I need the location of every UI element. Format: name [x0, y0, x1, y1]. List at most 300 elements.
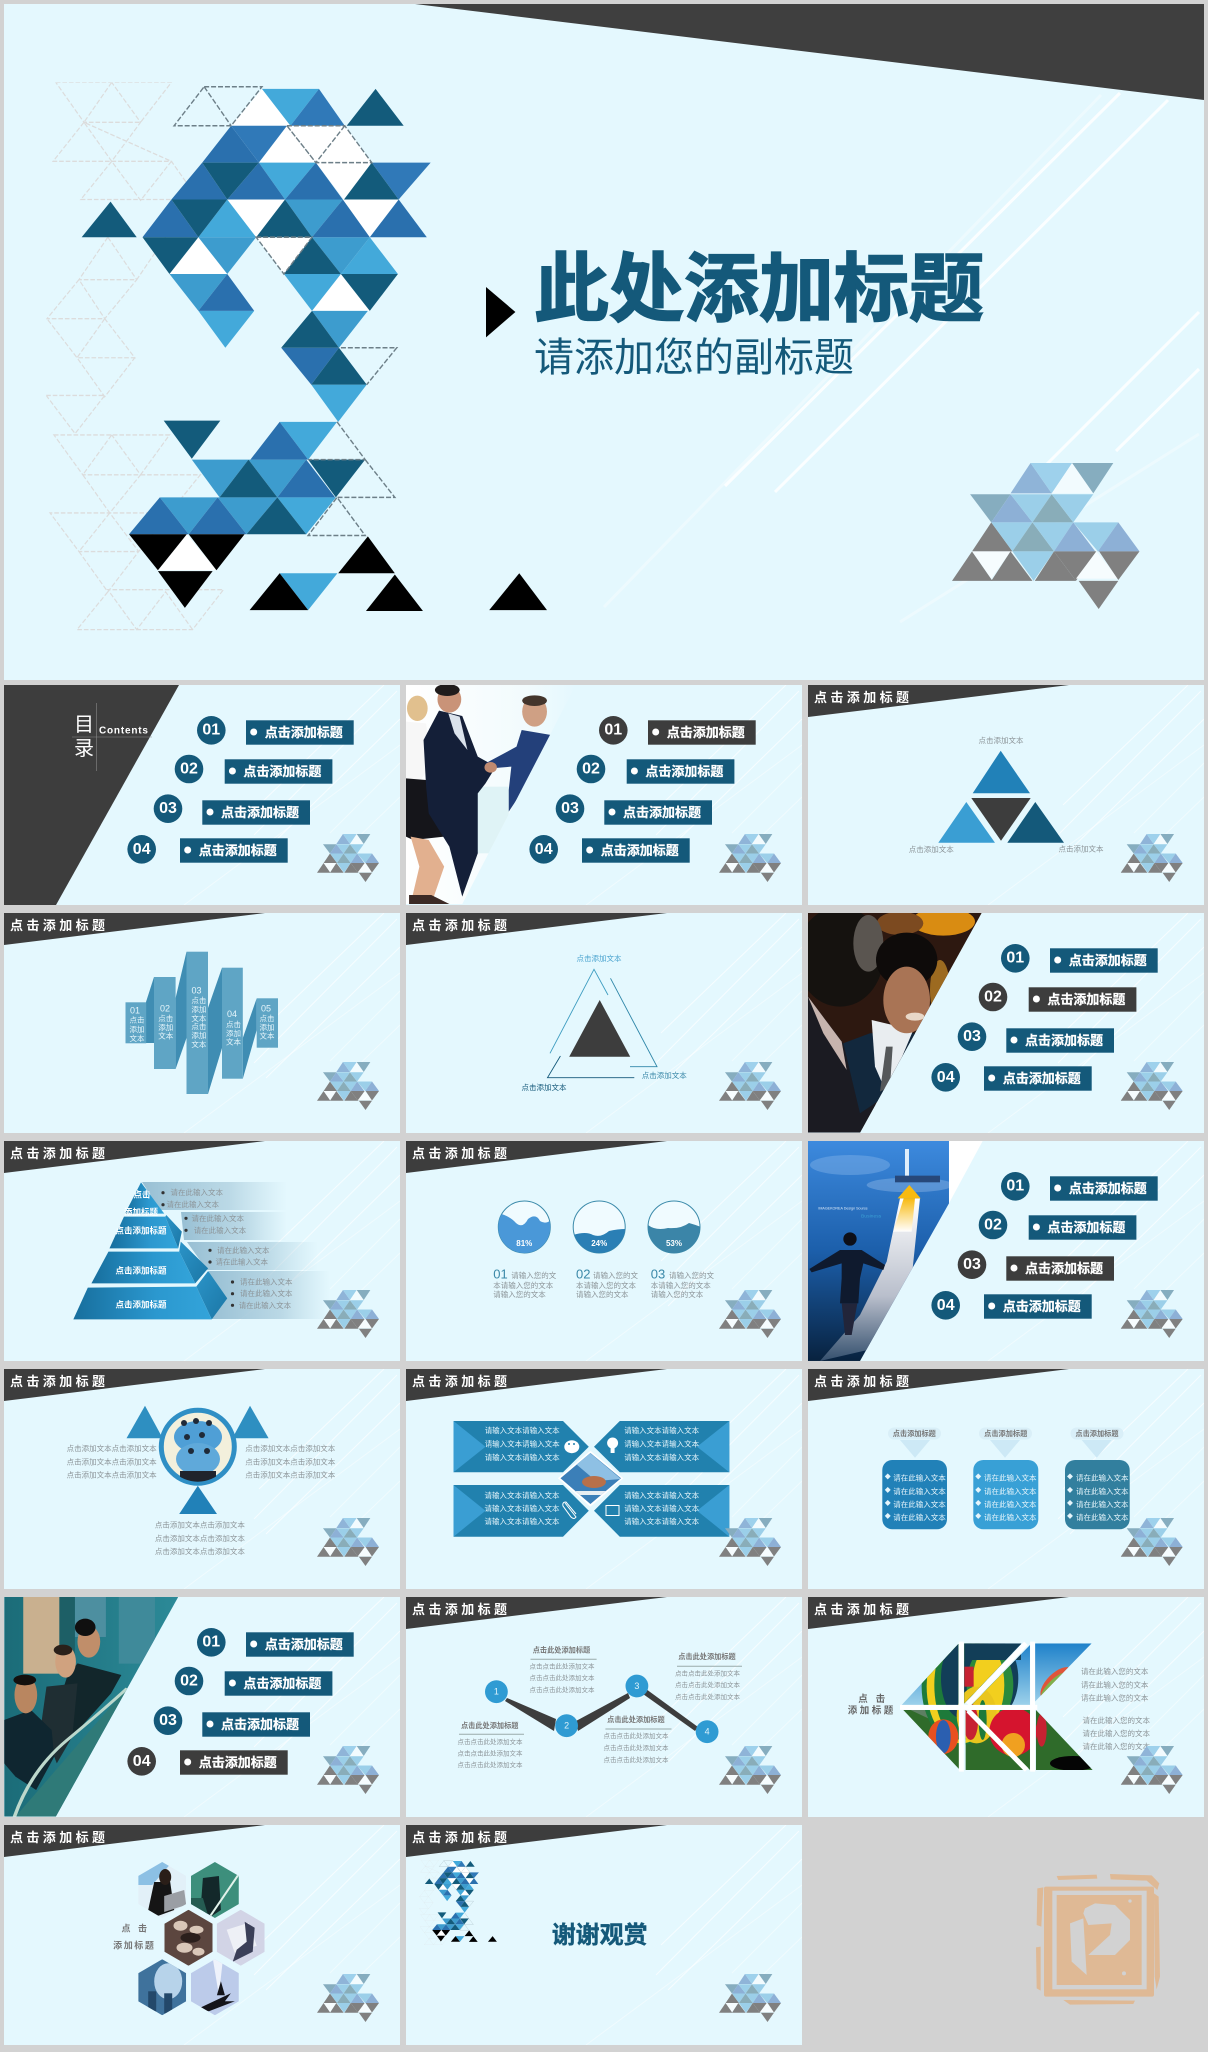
item 04: [931, 1291, 1092, 1320]
card 2: 请在此输入文本: [984, 1499, 1037, 1509]
cover small triangle logo: [952, 463, 1140, 609]
logo: [1121, 1290, 1183, 1338]
timeline nodes: 1: [494, 1687, 499, 1697]
header banner: [808, 685, 1069, 717]
card 2: ◆: [975, 1487, 981, 1494]
text 02: 请输入您的文: [593, 1270, 638, 1280]
header banner: [406, 1369, 667, 1401]
gauge 24%: [573, 1201, 626, 1256]
item 01 highlighted: 点击添加标题: [667, 725, 745, 740]
pyramid labels: [115, 1189, 167, 1309]
three triangles: [126, 1406, 269, 1514]
stamp logo: [1036, 1874, 1160, 2005]
panel: triangle diagram slide: [808, 685, 1204, 905]
item 04: [127, 835, 288, 864]
text block 2: 点击点击此处添加文本: [530, 1685, 595, 1694]
text right: 点击添加文本点击添加文本: [245, 1470, 336, 1480]
item 01: 点击添加标题: [265, 725, 343, 740]
text right: [245, 1443, 336, 1480]
text 01: 请输入您的文本: [493, 1289, 546, 1299]
text 03: [651, 1266, 714, 1299]
text block 4: 点击点击此处添加文本: [675, 1692, 740, 1701]
text block 3: 点击此处添加标题: [607, 1715, 665, 1724]
team photo circle: [161, 1410, 234, 1485]
card 1: 请在此输入文本: [893, 1499, 946, 1509]
item 02 highlighted: [979, 983, 1136, 1012]
item 03 highlighted: 03: [963, 1256, 981, 1273]
text block 3: [604, 1715, 672, 1764]
text bottom: 点击添加文本点击添加文本: [155, 1533, 245, 1543]
icon: bulb: [607, 1438, 618, 1453]
panel: zigzag timeline slide: [406, 1597, 802, 1817]
header banner: 点击添加标题: [10, 1146, 108, 1161]
zigzag connectors: [505, 1689, 698, 1731]
item 03: 03: [963, 1028, 981, 1045]
timeline nodes: [485, 1675, 718, 1743]
card 2: ◆: [975, 1514, 981, 1521]
card 3: ◆: [1067, 1474, 1073, 1481]
folded ribbon: 文本: [226, 1036, 241, 1046]
folded ribbon: 04: [227, 1009, 237, 1019]
right text: 请在此输入您的文本: [1083, 1728, 1151, 1738]
left label: [848, 1693, 896, 1716]
bullet list: 请在此输入文本: [216, 1256, 268, 1266]
hexagon photo 3: [164, 1910, 212, 1966]
item 04: 04: [133, 841, 151, 858]
item 02: 02: [180, 760, 198, 778]
panel: handshake contents slide: [406, 684, 802, 905]
card 2: 请在此输入文本: [984, 1472, 1037, 1482]
item 03: 点击添加标题: [623, 805, 701, 820]
right text: 请在此输入您的文本: [1083, 1715, 1151, 1725]
item 01: 01: [202, 722, 220, 738]
icon: tablet: [606, 1506, 619, 1516]
block text: 请输入文本请输入文本: [624, 1503, 700, 1513]
panel: thank you slide: [406, 1825, 802, 2045]
item 03: [958, 1022, 1114, 1053]
card 1: 请在此输入文本: [893, 1486, 946, 1496]
logo: [317, 1062, 379, 1110]
item 02 highlighted: 点击添加标题: [1047, 992, 1125, 1007]
text block 2: 点击点击此处添加文本: [530, 1662, 595, 1670]
centre diamond photo: [558, 1451, 624, 1506]
panel: three cards slide: [808, 1369, 1204, 1589]
left label: 点 击: [858, 1693, 886, 1705]
hexagon photo 2: [191, 1862, 239, 1918]
text 03: 请输入您的文本: [651, 1289, 704, 1299]
block text: 请输入文本请输入文本: [484, 1516, 560, 1526]
panel: cover slide: [4, 4, 1204, 680]
text 02: 本请输入您的文本: [576, 1280, 636, 1290]
panel: hexagon gallery slide: [4, 1825, 400, 2045]
header banner: 点击添加标题: [10, 918, 108, 933]
card 3: 请在此输入文本: [1076, 1499, 1129, 1509]
item 03: 点击添加标题: [1025, 1033, 1103, 1048]
text right: 点击添加文本点击添加文本: [245, 1443, 336, 1453]
folded ribbon: 01: [130, 1005, 140, 1015]
item 04: 04: [937, 1069, 955, 1086]
four blocks: [454, 1421, 729, 1537]
pyramid labels: 添加标题: [124, 1207, 158, 1217]
header banner: [808, 1597, 1069, 1629]
gauge 53%: [648, 1201, 701, 1256]
item 03: [154, 1706, 310, 1737]
card 2: 请在此输入文本: [984, 1486, 1037, 1496]
pyramid: [73, 1182, 227, 1319]
folded ribbon: 添加: [226, 1028, 241, 1038]
item 03: 03: [561, 800, 579, 817]
item 01: 点击添加标题: [1069, 1181, 1147, 1196]
pyramid labels: 点击添加标题: [115, 1225, 167, 1235]
folded ribbon: 文本: [191, 1013, 207, 1023]
cover triangle mosaic: [46, 82, 547, 630]
bullet list: 请在此输入文本: [192, 1213, 244, 1223]
text left: 点击添加文本点击添加文本: [67, 1443, 157, 1453]
card 3: 请在此输入文本: [1076, 1486, 1129, 1496]
panel: cycle triangle slide: [406, 913, 802, 1133]
block text: 请输入文本请输入文本: [484, 1503, 560, 1513]
header banner: [4, 1141, 265, 1173]
card 2: ◆: [975, 1474, 981, 1481]
header banner: [406, 913, 667, 945]
item 01: [1001, 1172, 1158, 1201]
text right: 点击添加文本点击添加文本: [245, 1456, 336, 1466]
logo: [317, 1746, 379, 1794]
text block 2: 点击此处添加标题: [533, 1646, 590, 1654]
item 01: [197, 716, 354, 745]
gauge 81%: [496, 1201, 552, 1256]
folded ribbon: 文本: [191, 1039, 207, 1049]
item 02: 点击添加标题: [645, 764, 723, 779]
logo: [719, 1290, 781, 1338]
text bottom: [155, 1520, 245, 1556]
logo: [719, 1746, 781, 1794]
dark centre triangle: [569, 1000, 630, 1057]
fading text bands: [142, 1182, 330, 1319]
white sliver: [949, 1141, 983, 1203]
icon: paperclip: [563, 1502, 576, 1518]
panel: arrow photo contents slide: [808, 1141, 1204, 1361]
folded ribbon: 添加: [158, 1022, 173, 1032]
logo: [317, 1290, 379, 1338]
item 02: 02: [984, 1216, 1002, 1234]
folded ribbon: 添加: [191, 1030, 206, 1040]
logo: [317, 1518, 379, 1566]
hexagon photo 4: [217, 1910, 265, 1966]
item 03: 03: [159, 1712, 177, 1729]
item 03: [556, 794, 712, 825]
mini triangle mosaic: [419, 1860, 497, 1945]
item 01: [1001, 944, 1158, 973]
labels: [522, 953, 687, 1092]
header banner: 点击添加标题: [412, 1830, 510, 1845]
item 02: 02: [582, 760, 600, 778]
logo: [719, 1062, 781, 1110]
text block 3: 点击点击此处添加文本: [604, 1731, 669, 1740]
logo: [317, 834, 379, 882]
text 03: 请输入您的文: [669, 1270, 714, 1280]
logo: [1121, 1518, 1183, 1566]
labels: 点击添加文本: [642, 1070, 687, 1080]
text 02: 02: [576, 1266, 590, 1282]
text left: 点击添加文本点击添加文本: [67, 1470, 157, 1480]
item 04: 点击添加标题: [1003, 1071, 1081, 1086]
text left: [67, 1443, 157, 1480]
text 03: 03: [651, 1266, 665, 1282]
text block 3: 点击点击此处添加文本: [604, 1755, 669, 1764]
item 04: [931, 1063, 1092, 1092]
header banner: 点击添加标题: [412, 1374, 510, 1389]
timeline nodes: 4: [705, 1727, 710, 1737]
four-triangle diagram: [938, 751, 1064, 843]
item 04 highlighted: 点击添加标题: [199, 1755, 277, 1770]
item 01: [197, 1628, 354, 1657]
panel: water gauge slide: [406, 1141, 802, 1361]
cycle arrows: [548, 969, 657, 1078]
labels: 点击添加文本: [1058, 844, 1104, 854]
folded ribbon: 文本: [158, 1030, 174, 1040]
item 02: [175, 755, 332, 784]
photo: woman and arrow: IMAGEKOREA Design Source: [818, 1206, 868, 1210]
item 01 highlighted: 01: [604, 722, 622, 738]
photo: woman and arrow: Business: [861, 1214, 882, 1220]
labels: 点击添加文本: [978, 735, 1024, 745]
card 3: [1065, 1428, 1130, 1529]
folded ribbon: 添加: [130, 1024, 144, 1034]
contents heading: [72, 703, 152, 771]
card 1: ◆: [885, 1514, 891, 1521]
photo: woman and arrow: [808, 1141, 953, 1361]
logo: [719, 834, 781, 882]
card 2: 点击添加标题: [984, 1429, 1027, 1438]
pyramid labels: 点击: [133, 1189, 151, 1199]
item 03: 点击添加标题: [221, 805, 299, 820]
item 01: 01: [202, 1634, 220, 1650]
folded ribbon: [126, 952, 278, 1094]
card 1: ◆: [885, 1474, 891, 1481]
folded ribbon: 点击: [158, 1013, 174, 1023]
folded ribbon: 文本: [130, 1033, 145, 1043]
card 1: ◆: [885, 1500, 891, 1507]
contents heading: 录: [74, 738, 94, 760]
block text: 请输入文本请输入文本: [484, 1490, 560, 1500]
card 1: 点击添加标题: [893, 1429, 936, 1438]
gauge 24%: 24%: [591, 1239, 607, 1248]
item 04: 点击添加标题: [601, 843, 679, 858]
block text: 请输入文本请输入文本: [485, 1438, 560, 1448]
card 2: [973, 1428, 1038, 1529]
card 1: 请在此输入文本: [893, 1512, 946, 1522]
folded ribbon: 文本: [260, 1030, 275, 1040]
folded ribbon: 点击: [191, 995, 207, 1005]
text block 4: [675, 1652, 742, 1701]
card 3: ◆: [1067, 1500, 1073, 1507]
text block 1: 点击点击此处添加文本: [458, 1737, 523, 1746]
block text: 请输入文本请输入文本: [624, 1516, 700, 1526]
panel: four arrow blocks slide: [406, 1369, 802, 1589]
text 02: 请输入您的文本: [576, 1289, 629, 1299]
folded ribbon: 点击: [191, 1021, 207, 1031]
item 01: 01: [1006, 950, 1024, 966]
header banner: 点击添加标题: [814, 1602, 912, 1617]
text block 2: [530, 1646, 597, 1694]
item 04: [529, 835, 690, 864]
header banner: 点击添加标题: [412, 1146, 510, 1161]
cover arrow: [486, 287, 515, 337]
header banner: 点击添加标题: [412, 918, 510, 933]
logo: [719, 1974, 781, 2022]
block text: 请输入文本请输入文本: [485, 1425, 560, 1435]
right text: 请在此输入您的文本: [1081, 1680, 1149, 1690]
cover subtitle: 请添加您的副标题: [534, 336, 854, 380]
bullet list: 请在此输入文本: [194, 1225, 247, 1235]
text block 1: 点击此处添加标题: [461, 1721, 518, 1730]
folded ribbon: 点击: [260, 1013, 275, 1023]
bullet list: 请在此输入文本: [240, 1276, 293, 1286]
text 02: [576, 1266, 638, 1299]
item 03 highlighted: 点击添加标题: [1025, 1261, 1103, 1276]
item 04 highlighted: [127, 1747, 288, 1776]
right text: 请在此输入您的文本: [1083, 1741, 1151, 1751]
card 1: 请在此输入文本: [893, 1472, 946, 1482]
text 01: [493, 1266, 557, 1299]
card 3: 请在此输入文本: [1076, 1512, 1129, 1522]
header banner: [406, 1141, 667, 1173]
bullet list: 请在此输入文本: [166, 1199, 219, 1209]
item 01: 点击添加标题: [1069, 953, 1147, 968]
header banner: [406, 1597, 667, 1629]
text 03: 本请输入您的文本: [651, 1280, 711, 1290]
text block 3: 点击点击此处添加文本: [604, 1743, 669, 1752]
hexagon label: 添加标题: [113, 1940, 156, 1951]
header banner: [406, 1825, 667, 1857]
panel: balloon mosaic slide: [808, 1597, 1204, 1817]
block text: [484, 1425, 700, 1526]
item 03: 点击添加标题: [221, 1717, 299, 1732]
item 04: 04: [937, 1297, 955, 1314]
folded ribbon: 点击: [226, 1019, 241, 1029]
cover dark corner banner: [415, 4, 1204, 100]
text block 2: 点击点击此处添加文本: [530, 1673, 595, 1682]
header banner: 点击添加标题: [412, 1602, 510, 1617]
block text: 请输入文本请输入文本: [624, 1425, 700, 1435]
panel: three men contents slide: [4, 1597, 400, 1817]
item 02: 点击添加标题: [1047, 1220, 1125, 1235]
item 02: 点击添加标题: [243, 1676, 321, 1691]
item 04: 点击添加标题: [1003, 1299, 1081, 1314]
hexagon photo 1: [138, 1862, 186, 1918]
timeline nodes: 2: [564, 1721, 569, 1731]
item 04 highlighted: 04: [133, 1753, 151, 1770]
labels: 点击添加文本: [576, 953, 622, 963]
block text: 请输入文本请输入文本: [485, 1452, 560, 1462]
hexagon label: 点 击: [122, 1922, 147, 1933]
pyramid labels: 点击添加标题: [115, 1266, 167, 1276]
panel: team circle slide: [4, 1369, 400, 1589]
item 02: [979, 1211, 1136, 1240]
folded ribbon: 02: [160, 1003, 170, 1013]
item 02: [577, 755, 734, 784]
logo: [1121, 1746, 1183, 1794]
block text: 请输入文本请输入文本: [624, 1490, 700, 1500]
header banner: [4, 1369, 265, 1401]
text block 4: 点击点击此处添加文本: [675, 1680, 740, 1689]
cover title: 此处添加标题: [534, 247, 984, 331]
folded ribbon: 点击: [130, 1014, 145, 1024]
contents heading: Contents: [99, 726, 149, 736]
thank you text: 谢谢观赏: [552, 1922, 648, 1949]
card 2: 请在此输入文本: [984, 1512, 1037, 1522]
right text: 请在此输入您的文本: [1081, 1692, 1149, 1702]
folded ribbon: 03: [191, 986, 202, 996]
logo: [719, 1518, 781, 1566]
right text: [1081, 1666, 1151, 1751]
text block 1: 点击点击此处添加文本: [458, 1760, 523, 1769]
hexagon photo 5: [138, 1959, 186, 2015]
contents heading: 目: [74, 714, 94, 736]
bullet list: 请在此输入文本: [217, 1245, 270, 1255]
labels: [909, 735, 1104, 854]
item 03: 03: [159, 800, 177, 817]
block text: 请输入文本请输入文本: [624, 1438, 700, 1448]
folded ribbon: 添加: [260, 1022, 274, 1032]
logo: [317, 1974, 379, 2022]
text block 1: 点击点击此处添加文本: [458, 1748, 523, 1758]
item 03 highlighted: [958, 1250, 1114, 1281]
card 3: ◆: [1067, 1487, 1073, 1494]
folded ribbon: 05: [261, 1003, 271, 1013]
card 1: ◆: [885, 1487, 891, 1494]
item 04: 04: [535, 841, 553, 858]
hexagon label: [113, 1922, 156, 1951]
header banner: [808, 1369, 1069, 1401]
text block 1: [458, 1721, 524, 1769]
photo: three businessmen: [4, 1597, 180, 1817]
text left: 点击添加文本点击添加文本: [67, 1456, 157, 1466]
card 2: ◆: [975, 1500, 981, 1507]
photo: handshake: [406, 685, 550, 904]
text bottom: 点击添加文本点击添加文本: [155, 1520, 245, 1530]
text 01: 01: [493, 1266, 508, 1282]
item 03: [154, 794, 310, 825]
photo: two businessmen: [808, 913, 982, 1133]
header banner: [4, 1825, 265, 1857]
card 3: 点击添加标题: [1075, 1429, 1119, 1438]
text 01: 本请输入您的文本: [493, 1280, 554, 1290]
header banner: 点击添加标题: [10, 1830, 108, 1845]
card 3: 请在此输入文本: [1076, 1472, 1129, 1482]
block text: 请输入文本请输入文本: [624, 1452, 700, 1462]
item 01: 01: [1006, 1178, 1024, 1194]
photo mosaic: balloons: [900, 1642, 1092, 1772]
panel: pyramid slide: [4, 1141, 400, 1361]
folded ribbon: 添加: [191, 1004, 206, 1014]
header banner: 点击添加标题: [10, 1374, 108, 1389]
hexagon photo 6: [191, 1959, 239, 2015]
bullet list: 请在此输入文本: [170, 1187, 223, 1197]
card 1: [882, 1428, 947, 1529]
item 04: 点击添加标题: [199, 843, 277, 858]
panel: folded ribbon slide: [4, 913, 400, 1133]
item 01: 点击添加标题: [265, 1637, 343, 1652]
panel: contents slide: [4, 685, 400, 905]
icon: palette: [564, 1440, 579, 1453]
gauge 53%: 53%: [666, 1239, 682, 1248]
timeline nodes: 3: [634, 1681, 639, 1691]
text block 4: 点击点击此处添加文本: [675, 1668, 740, 1678]
gauge 81%: 81%: [516, 1239, 532, 1248]
labels: 点击添加文本: [909, 844, 954, 854]
